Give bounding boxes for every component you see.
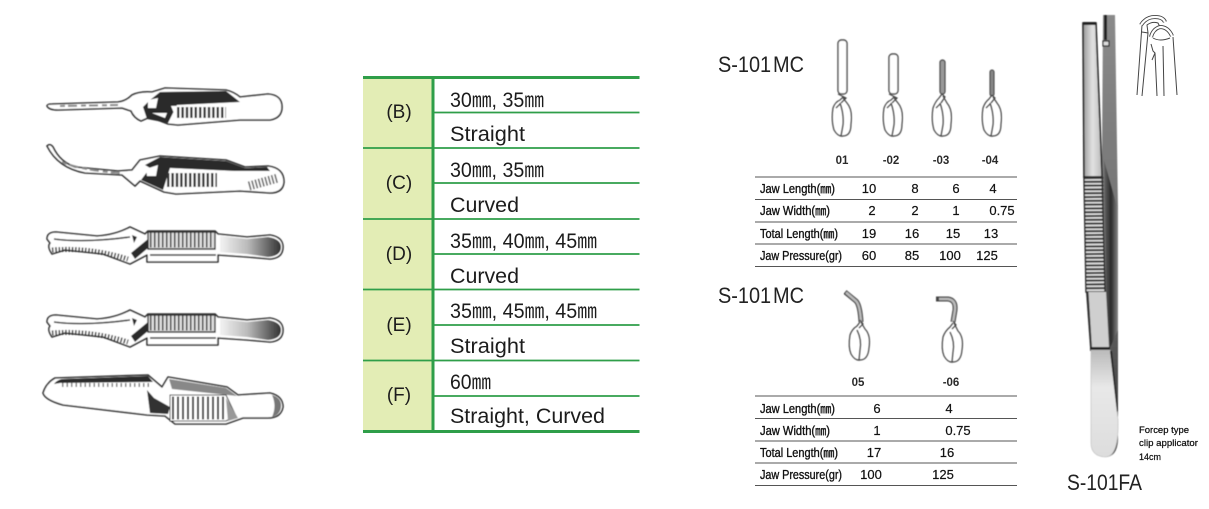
illustration: clip C <box>47 145 284 194</box>
specification table 01 to 04: 6 <box>952 181 960 196</box>
row C: (C) <box>386 173 412 194</box>
specification table 01 to 04: 125 <box>976 248 998 263</box>
row F: 60㎜ <box>450 371 491 394</box>
specification table 01 to 04: 13 <box>984 226 998 241</box>
row B <box>386 89 544 146</box>
specification table 01 to 04: 10 <box>862 181 876 196</box>
illustration: clip B <box>47 88 282 125</box>
detail sketch: jaw tip <box>1137 17 1177 96</box>
panel: S-101 MC straight clips <box>718 40 1017 266</box>
note: forcep description: Forcep type <box>1139 425 1189 436</box>
specification table 01 to 04: Total Length(㎜) <box>760 227 838 241</box>
specification table 05 and 06: 125 <box>932 467 954 482</box>
row C: Curved <box>450 194 519 217</box>
row D: Curved <box>450 265 519 288</box>
illustration: clip E <box>47 310 283 347</box>
row F <box>387 371 605 428</box>
specification table 01 to 04: 2 <box>868 203 876 218</box>
table rules <box>363 77 640 432</box>
row F: (F) <box>387 385 411 406</box>
row C <box>386 159 544 217</box>
specification table 05 and 06: Jaw Length(㎜) <box>760 402 835 416</box>
illustration: clip F <box>43 375 283 424</box>
icon: clip 01 <box>832 40 852 136</box>
specification table 01 to 04: 8 <box>911 181 919 196</box>
specification table 05 and 06: 6 <box>873 401 881 416</box>
specification table 05 and 06: 1 <box>873 423 881 438</box>
specification table 01 to 04: 60 <box>862 248 876 263</box>
label column background <box>363 77 433 432</box>
row E: Straight <box>450 335 525 358</box>
specification table 05 and 06: 100 <box>860 467 882 482</box>
icon: clip 06 <box>936 299 962 362</box>
clip model numbers: -02 <box>883 155 899 167</box>
row D: (D) <box>386 244 412 265</box>
icon: clip 03 <box>932 60 952 136</box>
row B: Straight <box>450 123 525 146</box>
icon: clip 05 <box>845 292 870 360</box>
specification table 05 and 06 <box>755 396 1017 486</box>
panel: clip illustrations B to F <box>43 88 284 424</box>
row C: 30㎜, 35㎜ <box>450 159 544 182</box>
specification table 01 to 04: Jaw Width(㎜) <box>760 204 830 218</box>
row B: (B) <box>386 102 412 123</box>
specification table 01 to 04: 85 <box>905 248 919 263</box>
specification table 01 to 04: 4 <box>989 181 997 196</box>
panel: S-101FA forcep applicator <box>1067 15 1198 495</box>
specification table 05 and 06: 16 <box>940 445 954 460</box>
illustration: forcep <box>1083 15 1118 457</box>
heading: S-101 MC <box>718 283 804 308</box>
specification table 01 to 04: 100 <box>939 248 961 263</box>
clip model numbers <box>836 155 999 167</box>
specification table 01 to 04: 2 <box>911 203 919 218</box>
heading: model name: S-101FA <box>1067 470 1142 495</box>
row E <box>386 300 597 358</box>
illustration: clip D <box>47 227 283 264</box>
heading: S-101 MC <box>718 52 804 77</box>
specification table 01 to 04 <box>755 177 1017 266</box>
specification table 05 and 06: 4 <box>945 401 953 416</box>
specification table 05 and 06: 17 <box>867 445 881 460</box>
icon: clip 04 <box>982 70 1002 136</box>
specification table 05 and 06: Jaw Pressure(gr) <box>760 468 842 482</box>
row D: 35㎜, 40㎜, 45㎜ <box>450 230 597 253</box>
note: forcep description: clip applicator <box>1139 438 1198 449</box>
specification table 01 to 04: 16 <box>905 226 919 241</box>
note: forcep description: 14cm <box>1139 452 1161 463</box>
specification table 05 and 06: Jaw Width(㎜) <box>760 424 830 438</box>
row E: (E) <box>386 315 412 336</box>
specification table 01 to 04: Jaw Length(㎜) <box>760 182 835 196</box>
row E: 35㎜, 45㎜, 45㎜ <box>450 300 597 323</box>
clip model numbers: -06 <box>943 377 959 389</box>
clip model numbers: 01 <box>836 155 849 167</box>
clip model numbers <box>852 377 959 389</box>
specification table 01 to 04: 0.75 <box>989 203 1015 218</box>
specification table 05 and 06: 0.75 <box>945 423 971 438</box>
specification table 01 to 04: Jaw Pressure(gr) <box>760 249 842 263</box>
specification table 01 to 04: 19 <box>862 226 876 241</box>
note: forcep description <box>1139 425 1198 463</box>
row F: Straight, Curved <box>450 405 605 428</box>
specification table 01 to 04: 15 <box>946 226 960 241</box>
icon: clip 02 <box>883 54 902 136</box>
clip model numbers: -04 <box>982 155 999 167</box>
panel: size and shape table <box>363 77 640 432</box>
clip model numbers: -03 <box>933 155 949 167</box>
row B: 30㎜, 35㎜ <box>450 89 544 112</box>
clip model numbers: 05 <box>852 377 865 389</box>
specification table 05 and 06: Total Length(㎜) <box>760 446 838 460</box>
row D <box>386 230 597 288</box>
panel: S-101 MC curved clips <box>718 283 1017 486</box>
specification table 01 to 04: 1 <box>952 203 960 218</box>
